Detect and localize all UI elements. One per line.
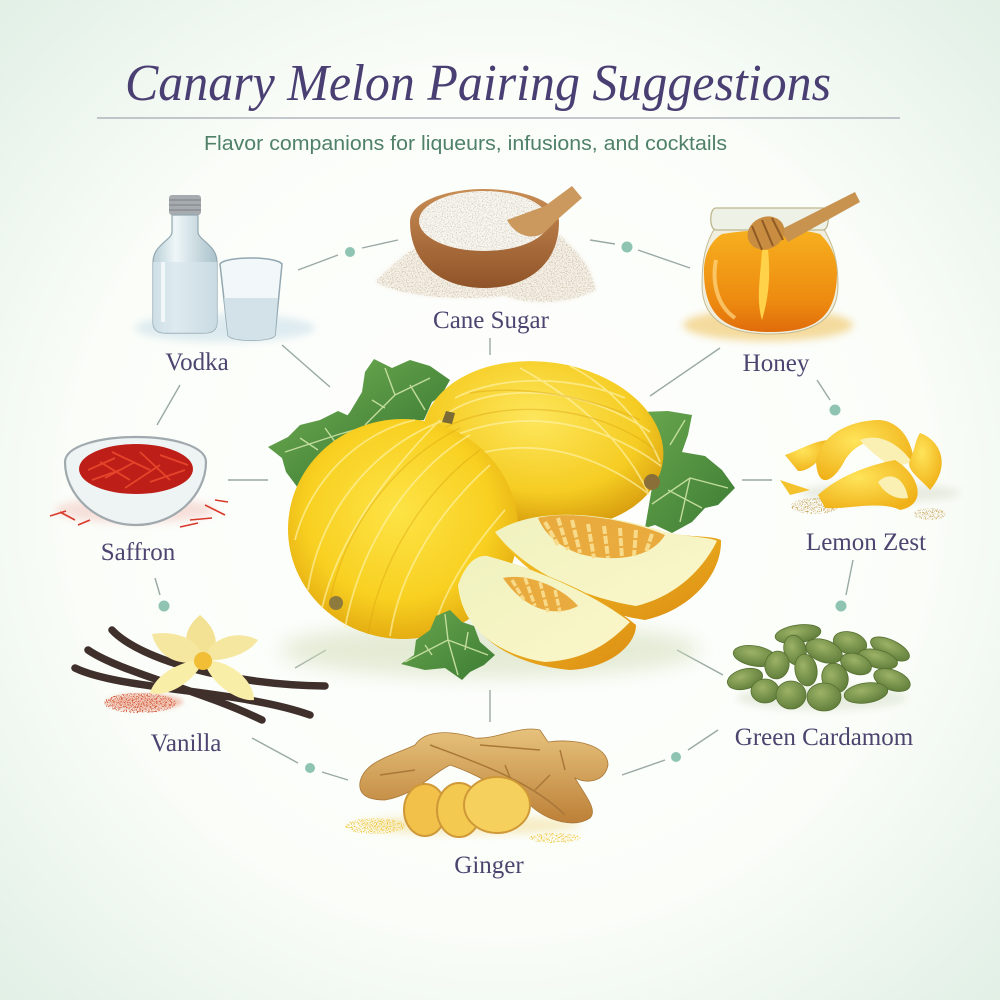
icon: pods [725, 622, 913, 711]
icon: glass bowl [65, 437, 206, 525]
item: vanilla [75, 615, 325, 757]
icon: shot glass [220, 258, 282, 340]
label: Vanilla: Vanilla [151, 730, 221, 757]
right leaves [640, 411, 735, 533]
icon: lemon peel [780, 420, 942, 510]
sugar pile [375, 235, 596, 302]
icon: jar [702, 208, 838, 334]
item: vodka [135, 195, 315, 376]
connector ring [155, 240, 853, 780]
subtitle: Flavor companions for liqueurs, infusions, and cocktails [204, 133, 727, 155]
central melon group [268, 346, 735, 680]
label: Vodka: Vodka [165, 349, 229, 376]
item: ginger [345, 729, 608, 879]
item: lemon zest [780, 420, 960, 556]
title: Canary Melon Pairing Suggestions [125, 55, 831, 112]
icon: flower [150, 615, 258, 700]
back melon [412, 346, 674, 544]
label: Honey: Honey [743, 350, 810, 377]
front melon [288, 411, 518, 639]
label: Saffron: Saffron [101, 539, 176, 566]
item: cane sugar [375, 186, 596, 334]
item: honey [683, 192, 860, 377]
bottom leaf [401, 610, 495, 680]
front slice [458, 556, 636, 670]
saffron threads [50, 500, 228, 527]
back slice [495, 515, 721, 620]
icon: dipper [742, 192, 860, 256]
icon: vanilla pods [75, 630, 325, 720]
item: green cardamom [725, 622, 914, 751]
icon: ginger root [360, 729, 608, 823]
label: Lemon Zest: Lemon Zest [806, 529, 926, 556]
sugar [419, 191, 549, 251]
label: Green Cardamom: Green Cardamom [735, 724, 914, 751]
left leaves [268, 359, 450, 488]
item: saffron [50, 437, 228, 566]
icon: ginger slices [404, 777, 530, 837]
icon: bowl [410, 189, 559, 288]
shadow [280, 622, 700, 678]
icon: scoop [507, 186, 582, 236]
icon: bottle [153, 195, 217, 333]
label: Cane Sugar: Cane Sugar [433, 307, 550, 334]
label: Ginger: Ginger [454, 852, 524, 879]
